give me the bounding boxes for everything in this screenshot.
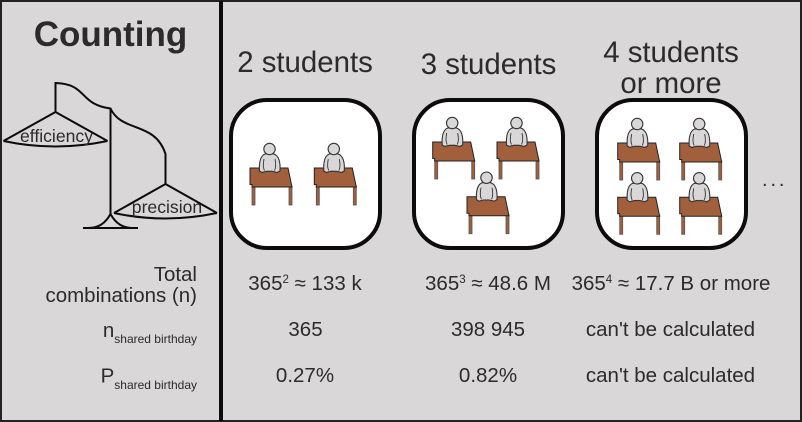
- value: total 4 students: 365: [572, 272, 606, 295]
- icon: student at desk: [250, 143, 292, 205]
- row label: P shared birthday: P: [101, 364, 114, 388]
- panel: 4 students classroom: [597, 100, 746, 248]
- value: total 2 students: 365: [248, 272, 283, 295]
- heading: 3 students: 3 students: [421, 48, 556, 81]
- value: P 2 students: 0.27%: [276, 364, 334, 387]
- value: total 2 students: 2: [283, 274, 289, 286]
- panel: 3 students classroom: [414, 100, 563, 248]
- heading: 4 students or more: or more: [620, 67, 722, 100]
- row label: n shared birthday: n: [103, 319, 114, 342]
- heading: 4 students or more: 4 students: [603, 36, 739, 69]
- row label: total combinations: combinations (n): [45, 284, 197, 307]
- row label: P shared birthday: shared birthday: [114, 378, 197, 392]
- value: P 4 students: can't be calculated: [586, 364, 755, 387]
- icon: student at desk: [314, 143, 356, 205]
- value: n 2 students: 365: [288, 318, 323, 341]
- title: Counting: [34, 15, 187, 54]
- row label: n shared birthday: shared birthday: [114, 332, 197, 346]
- heading: 2 students: 2 students: [237, 46, 373, 79]
- icon: student at desk: [497, 117, 539, 179]
- value: P 3 students: 0.82%: [459, 364, 517, 387]
- icon: student at desk: [433, 117, 475, 179]
- icon: student at desk: [467, 172, 509, 234]
- icon: student at desk: [618, 118, 660, 180]
- panel: 2 students classroom: [231, 100, 380, 248]
- value: total 2 students: ≈ 133 k: [289, 272, 362, 295]
- value: total 3 students: 3: [459, 274, 466, 286]
- value: n 4 students: can't be calculated: [586, 318, 755, 341]
- value: n 3 students: 398 945: [451, 318, 525, 341]
- row label: total combinations: Total: [154, 263, 197, 286]
- value: total 4 students: 4: [606, 274, 613, 286]
- icon: student at desk: [680, 118, 722, 180]
- label: precision: precision: [132, 197, 202, 217]
- vertical divider: [219, 1, 223, 421]
- value: total 3 students: 365: [425, 272, 459, 295]
- ellipsis: ...: [762, 169, 787, 191]
- icon: student at desk: [680, 173, 722, 234]
- value: total 3 students: ≈ 48.6 M: [466, 272, 551, 295]
- label: efficiency: efficiency: [20, 126, 93, 146]
- value: total 4 students: ≈ 17.7 B or more: [612, 272, 770, 295]
- icon: student at desk: [618, 173, 660, 234]
- icon: balance scale: [4, 83, 217, 228]
